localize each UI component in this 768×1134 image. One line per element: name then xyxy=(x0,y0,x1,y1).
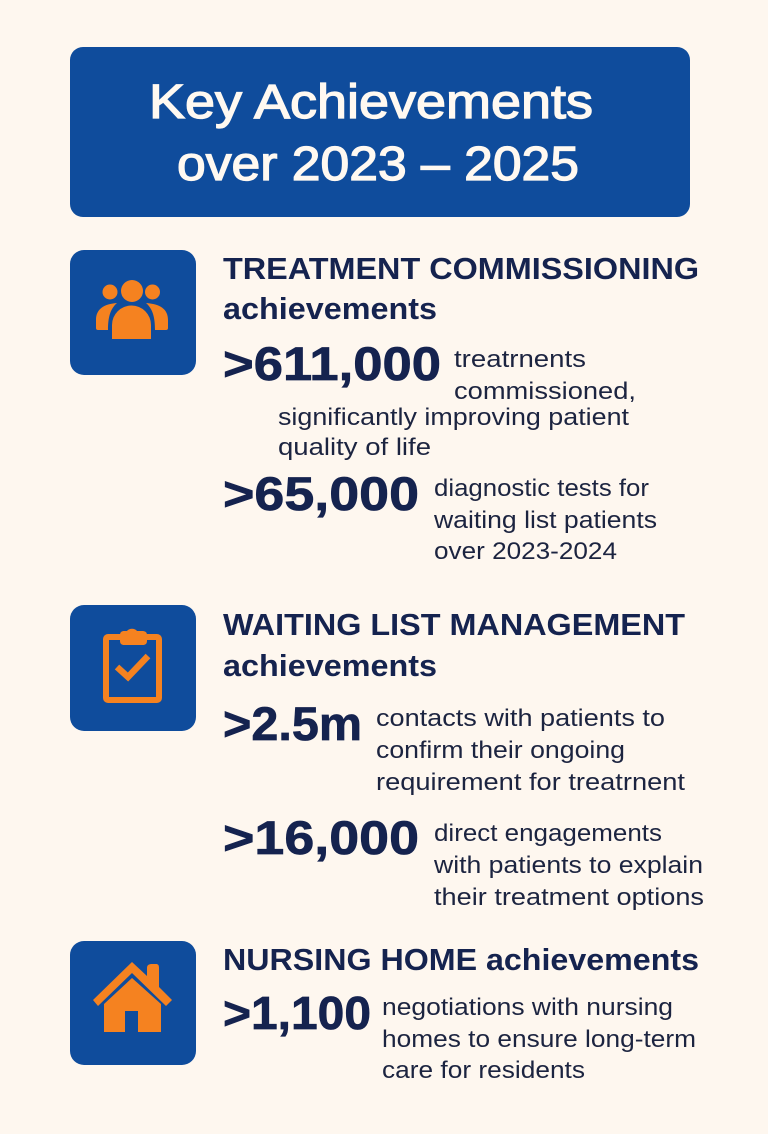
stat: 1,100 negotiations: homes to ensure long-term xyxy=(382,1026,696,1053)
title text: Key Achievements xyxy=(149,75,593,129)
heading xyxy=(223,607,685,683)
stat: 1,100 negotiations xyxy=(223,987,696,1084)
stat: 2.5m contacts: contacts with patients to xyxy=(376,705,665,732)
icon: house xyxy=(70,941,196,1065)
title banner xyxy=(70,47,690,217)
stat: 65,000 diagnostic tests: over 2023-2024 xyxy=(434,538,617,565)
heading: achievements xyxy=(223,648,437,683)
stat: 611,000 treatments: treatrnents xyxy=(454,346,586,373)
stat: 1,100 negotiations: care for residents xyxy=(382,1057,585,1084)
panel: nursing home xyxy=(70,941,699,1084)
stat: 65,000 diagnostic tests: >65,000 xyxy=(223,468,419,521)
stat: 2.5m contacts: confirm their ongoing xyxy=(376,737,625,764)
stat: 1,100 negotiations: negotiations with nursing xyxy=(382,994,673,1021)
stat: 16,000 direct engagements xyxy=(223,812,704,911)
stat: 2.5m contacts: requirement for treatrnent xyxy=(376,769,685,796)
stat: 2.5m contacts: >2.5m xyxy=(223,698,362,751)
heading: achievements xyxy=(223,291,437,326)
stat: 1,100 negotiations: >1,100 xyxy=(223,987,371,1039)
stat: 611,000 treatments: >611,000 xyxy=(223,338,441,391)
title text xyxy=(149,75,593,191)
heading: NURSING HOME achievements xyxy=(223,942,699,977)
panel: treatment commissioning xyxy=(70,250,699,565)
icon: clipboard with check xyxy=(70,605,196,731)
heading xyxy=(223,251,699,326)
stat: 16,000 direct engagements: direct engagements xyxy=(434,820,662,847)
icon: group of people xyxy=(70,250,196,375)
title text: over 2023 – 2025 xyxy=(177,137,579,191)
stat: 2.5m contacts xyxy=(223,698,685,796)
panel: waiting list management xyxy=(70,605,704,911)
stat: 65,000 diagnostic tests: diagnostic tests for xyxy=(434,475,649,502)
stat: 65,000 diagnostic tests: waiting list patients xyxy=(433,507,657,534)
stat: 611,000 treatments: commissioned, xyxy=(454,378,636,405)
heading: TREATMENT COMMISSIONING xyxy=(223,251,699,286)
stat: 611,000 treatments: significantly improving patient xyxy=(278,404,629,431)
stat: 65,000 diagnostic tests xyxy=(223,468,657,565)
stat: 16,000 direct engagements: with patients to explain xyxy=(433,852,703,879)
stat: 16,000 direct engagements: >16,000 xyxy=(223,812,419,865)
stat: 611,000 treatments xyxy=(223,338,636,461)
stat: 16,000 direct engagements: their treatment options xyxy=(434,884,704,911)
stat: 611,000 treatments: quality of life xyxy=(278,434,431,461)
heading: WAITING LIST MANAGEMENT xyxy=(223,607,685,642)
